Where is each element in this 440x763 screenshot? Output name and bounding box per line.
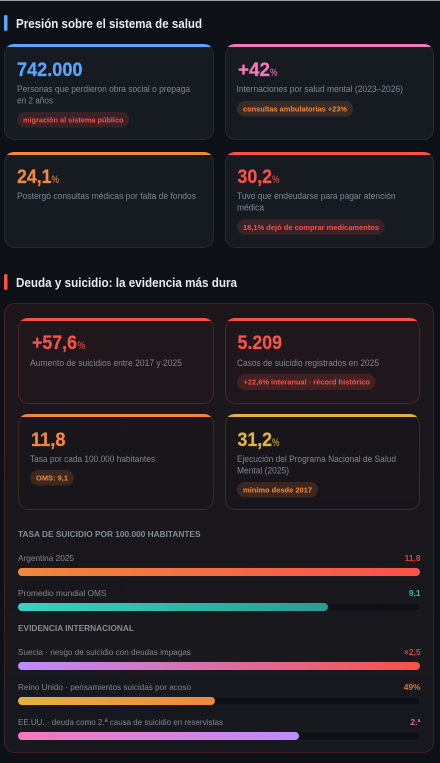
badge: medicamentos <box>237 219 384 235</box>
bar: EE.UU. <box>18 717 421 740</box>
description: aumento: Aumento de suicidios entre 2017 y 2025 <box>30 358 182 368</box>
badge: mínimo <box>237 482 318 498</box>
bar: Promedio mundial OMS <box>18 588 421 611</box>
value: 24,1%: % <box>52 174 59 186</box>
panel: card 24,1% <box>4 152 214 248</box>
panel: deuda y suicidio <box>4 304 434 752</box>
description: postergó: Postergó consultas médicas por falta de fondos <box>17 191 196 201</box>
card: 11,8 <box>18 414 214 510</box>
bar: Suecia: Suecia · riesgo de suicidio con deudas impagas <box>18 647 191 657</box>
badge: consultas: consultas ambulatorias +23% <box>243 104 347 114</box>
description: endeudarse <box>237 191 396 213</box>
description: endeudarse: Tuvo que endeudarse para pagar atención <box>237 191 396 201</box>
description: internaciones: Internaciones por salud mental (2023–2026) <box>236 84 403 94</box>
card: 31,2% <box>225 414 420 510</box>
bar: Reino Unido: Reino Unido · pensamientos suicidas por acoso <box>18 682 191 692</box>
bar: EE.UU.: EE.UU. · deuda como 2.ª causa de suicidio en reservistas <box>18 717 223 727</box>
panel: card 742.000 <box>4 44 214 140</box>
value: 24,1%: 24,1 <box>17 166 52 188</box>
badge: consultas <box>237 101 353 116</box>
card: +57,6% <box>18 318 214 404</box>
badge: mínimo: mínimo desde 2017 <box>243 486 312 494</box>
value: +57,6%: +57,6 <box>32 332 77 354</box>
bar: Promedio mundial OMS: 9,1 <box>409 588 421 598</box>
value: 31,2%: 31,2 <box>238 429 272 451</box>
bar: Argentina 2025: Argentina 2025 <box>18 553 74 563</box>
value: 742.000: 742.000 <box>17 59 83 81</box>
heading: Presión sobre el sistema de salud: Presión sobre el sistema de salud <box>16 16 202 31</box>
heading: Deuda y suicidio: Deuda y suicidio: la evidencia más dura <box>16 275 238 290</box>
bar: Suecia <box>18 647 421 670</box>
panel: card +42% <box>225 44 434 140</box>
value: +57,6%: % <box>78 340 86 352</box>
description: casos: Casos de suicidio registrados en 2025 <box>237 358 379 368</box>
badge: récord <box>237 374 376 390</box>
description: obra social <box>17 84 190 106</box>
value: 30,2%: 30,2 <box>238 166 272 188</box>
card: 5.209 <box>225 318 420 404</box>
bar: Promedio mundial OMS: Promedio mundial OMS <box>18 588 107 598</box>
value: 11,8: 11,8 <box>31 429 66 451</box>
value: +42%: +42 <box>238 59 270 81</box>
badge: medicamentos: 18,1% dejó de comprar medicamentos <box>243 223 379 232</box>
description: tasa: Tasa por cada 100.000 habitantes <box>30 454 155 464</box>
description: programa: Mental (2025) <box>237 466 289 476</box>
badge: migración: migración al sistema público <box>23 116 124 124</box>
bar chart: tasa de suicidio <box>18 553 421 611</box>
bar: Reino Unido: 49% <box>404 682 421 692</box>
description: programa: Ejecución del Programa Nacional de Salud <box>237 454 396 464</box>
badge: récord: +22,6% interanual · récord histórico <box>244 378 370 387</box>
description: programa <box>237 454 396 476</box>
value: +42%: % <box>270 67 278 79</box>
heading: tasa de suicidio: TASA DE SUICIDIO POR 100.000 HABITANTES <box>18 529 201 539</box>
description: obra social: en 2 años <box>17 96 53 106</box>
description: endeudarse: médica <box>237 203 264 213</box>
badge: OMS: OMS: 9,1 <box>36 474 69 482</box>
bar: Argentina 2025: 11,8 <box>405 553 421 563</box>
panel: card 30,2% <box>225 152 434 248</box>
description: obra social: Personas que perdieron obra social o prepaga <box>17 84 190 94</box>
bar: Reino Unido <box>18 682 421 705</box>
value: 31,2%: % <box>272 437 280 449</box>
bar: Argentina 2025 <box>18 553 421 576</box>
badge: migración <box>17 112 129 128</box>
bar: Suecia: ×2,5 <box>404 647 421 657</box>
bar: EE.UU.: 2.ª <box>410 717 421 727</box>
heading: evidencia internacional: EVIDENCIA INTERNACIONAL <box>18 623 134 633</box>
value: 5.209: 5.209 <box>238 332 282 354</box>
bar chart: evidencia internacional <box>18 647 421 740</box>
badge: OMS <box>30 470 74 486</box>
value: 30,2%: % <box>272 174 280 186</box>
